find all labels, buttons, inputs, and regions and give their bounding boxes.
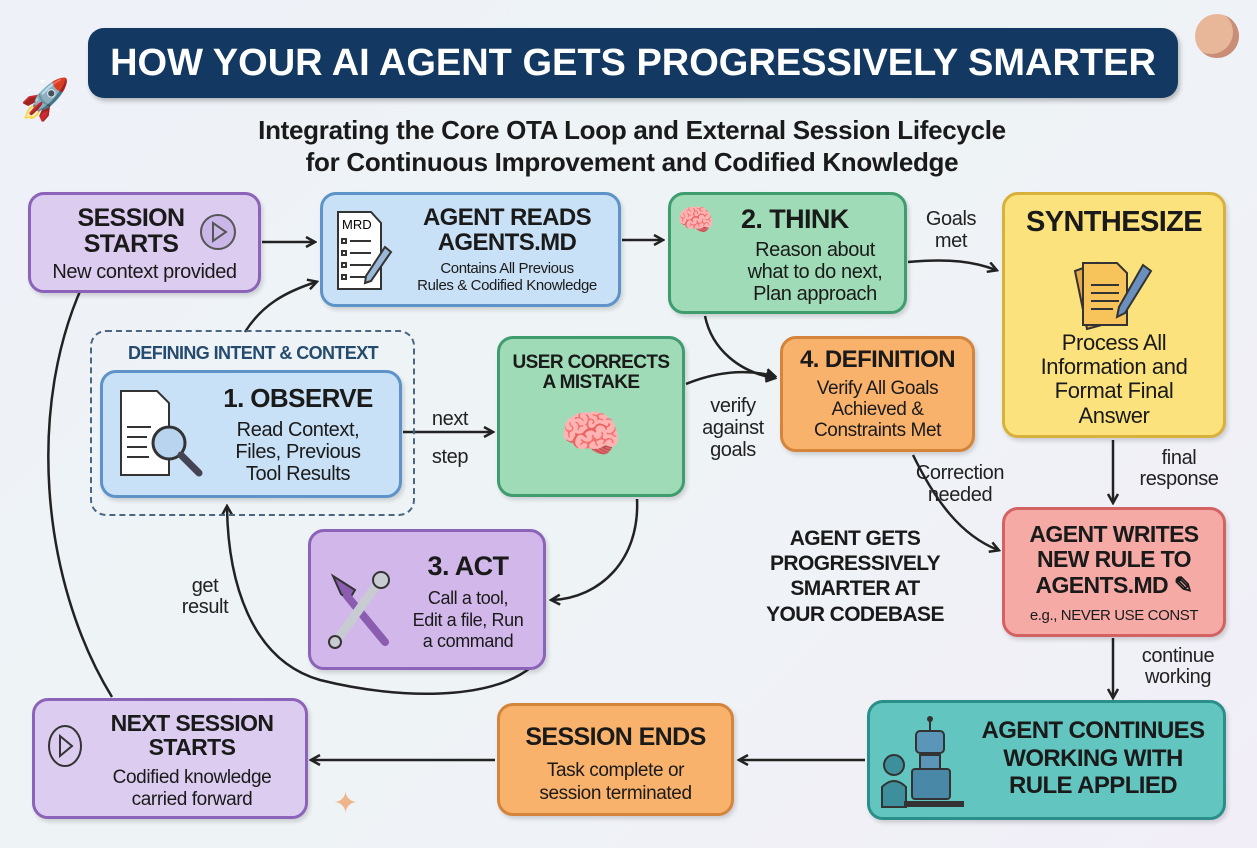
text block: agent gets progressively smarter: AGENT GETS [790,527,920,550]
label: goals met: met [935,230,967,252]
icon: MRD document: MRD [342,217,372,232]
panel: agent continues working [867,700,1226,820]
panel: 1. observe: 1. OBSERVE [223,383,373,413]
icon: sparkle: ✦ [333,787,358,820]
panel: 2. think: Reason about [755,239,875,261]
icon: hammer and wrench [328,571,390,649]
label: final response [1139,447,1219,490]
icon: brain: 🧠 [677,204,714,237]
icon: brain with bulb: 🧠 [560,406,622,462]
panel: 3. act [308,529,546,670]
icon: planet [1195,14,1239,58]
label: correction needed: Correction [916,462,1004,484]
text block: agent gets progressively smarter: YOUR CODEBASE [766,603,944,626]
panel: session starts: SESSION [78,204,184,232]
panel: 4. definition: 4. DEFINITION [800,346,955,373]
panel: agent reads agents.md: AGENTS.MD [438,229,576,256]
panel: session ends: session terminated [539,783,692,804]
panel: 3. act: Edit a file, Run [413,610,523,630]
icon: papers and pen [1074,262,1152,330]
panel: agent writes new rule: AGENTS.MD ✎ [1035,572,1193,598]
label: correction needed: needed [928,484,992,506]
title [88,28,1178,98]
panel: synthesize: Answer [1079,403,1149,428]
panel: 1. observe: Tool Results [246,463,350,485]
panel: agent continues working: WORKING WITH [1003,745,1183,772]
label: continue working [1142,645,1214,688]
panel: agent writes new rule [1002,507,1226,637]
panel: 2. think [668,192,907,314]
panel: session ends [497,703,734,816]
text block: agent gets progressively smarter: PROGRESSIVELY [770,552,940,575]
label: next step: next [432,408,468,430]
text block: agent gets progressively smarter [766,527,944,626]
panel: agent reads agents.md: AGENT READS [423,204,591,231]
panel: session starts: STARTS [84,230,178,258]
panel: session starts: New context provided [52,261,237,283]
text block: agent gets progressively smarter: SMARTER AT [790,577,920,600]
panel: next session starts [32,698,308,819]
panel: next session starts: Codified knowledge [113,767,271,788]
panel: synthesize: Information and [1041,354,1187,379]
panel: agent writes new rule: e.g., NEVER USE CONST [1030,607,1198,624]
title: HOW YOUR AI AGENT GETS PROGRESSIVELY SMARTER [110,42,1156,84]
panel: next session starts: NEXT SESSION [111,710,273,736]
panel: 2. think: Plan approach [753,283,877,305]
panel: synthesize: Format Final [1055,378,1173,403]
panel: session starts [28,192,261,293]
subtitle [258,115,1006,177]
panel: 1. observe: Files, Previous [235,441,361,463]
panel: defining intent & context (dashed group) [90,330,415,516]
panel: session ends: SESSION ENDS [525,723,706,751]
panel: synthesize: Process All [1062,330,1166,355]
label: verify against goals: goals [710,439,756,461]
panel: session ends: Task complete or [547,760,684,781]
panel: agent writes new rule: NEW RULE TO [1037,546,1191,572]
label: verify against goals: against [702,417,764,439]
label: get result: result [182,596,228,618]
subtitle: for Continuous Improvement and Codified Knowledge [306,147,958,177]
panel: agent continues working: AGENT CONTINUES [981,717,1204,744]
icon: document with magnifier [120,390,202,476]
icon: rocket: 🚀 [20,78,70,122]
panel: user corrects a mistake: USER CORRECTS [513,352,669,373]
icon: robot at laptop [881,716,964,808]
panel: 4. definition: Achieved & [831,399,924,420]
label: final response: response [1139,468,1219,490]
panel: agent writes new rule: AGENT WRITES [1029,521,1199,547]
icon: MRD document [337,211,392,290]
panel: 3. act: Call a tool, [428,588,508,608]
icon: play [48,725,82,767]
label: get result [182,575,229,618]
panel: 2. think: what to do next, [748,261,882,283]
label: goals met: Goals [926,208,976,230]
panel: 3. act: a command [423,631,513,651]
label: correction needed [916,462,1004,506]
panel: next session starts: STARTS [149,734,235,760]
label: get result: get [192,575,218,597]
panel: defining intent & context (dashed group): DEFINING INTENT & CONTEXT [128,343,378,363]
panel: agent reads agents.md: Rules & Codified Knowledge [417,276,597,294]
label: verify against goals: verify [710,395,756,417]
panel: 1. observe [100,370,402,498]
panel: 3. act: 3. ACT [428,551,508,581]
panel: user corrects a mistake [497,336,685,497]
icon: play [200,214,236,250]
panel: 4. definition: Constraints Met [814,420,941,441]
panel: synthesize [1002,192,1226,438]
panel: 2. think: 2. THINK [741,204,849,234]
panel: agent reads agents.md [320,192,621,307]
subtitle: Integrating the Core OTA Loop and External Session Lifecycle [258,115,1006,145]
label: final response: final [1162,447,1196,469]
label: next step: step [432,446,468,468]
panel: agent reads agents.md: Contains All Previous [440,260,574,277]
panel: 4. definition: Verify All Goals [817,378,938,399]
label: continue working: continue [1142,645,1214,667]
panel: next session starts: carried forward [132,789,252,810]
panel: synthesize: SYNTHESIZE [1026,206,1202,238]
panel: 4. definition [780,336,975,452]
panel: 1. observe: Read Context, [237,419,359,441]
label: continue working: working [1145,666,1211,688]
label: goals met [926,208,976,252]
panel: user corrects a mistake: A MISTAKE [542,372,640,393]
label: next step [432,408,468,468]
panel: agent continues working: RULE APPLIED [1009,772,1177,799]
label: verify against goals [702,395,764,461]
